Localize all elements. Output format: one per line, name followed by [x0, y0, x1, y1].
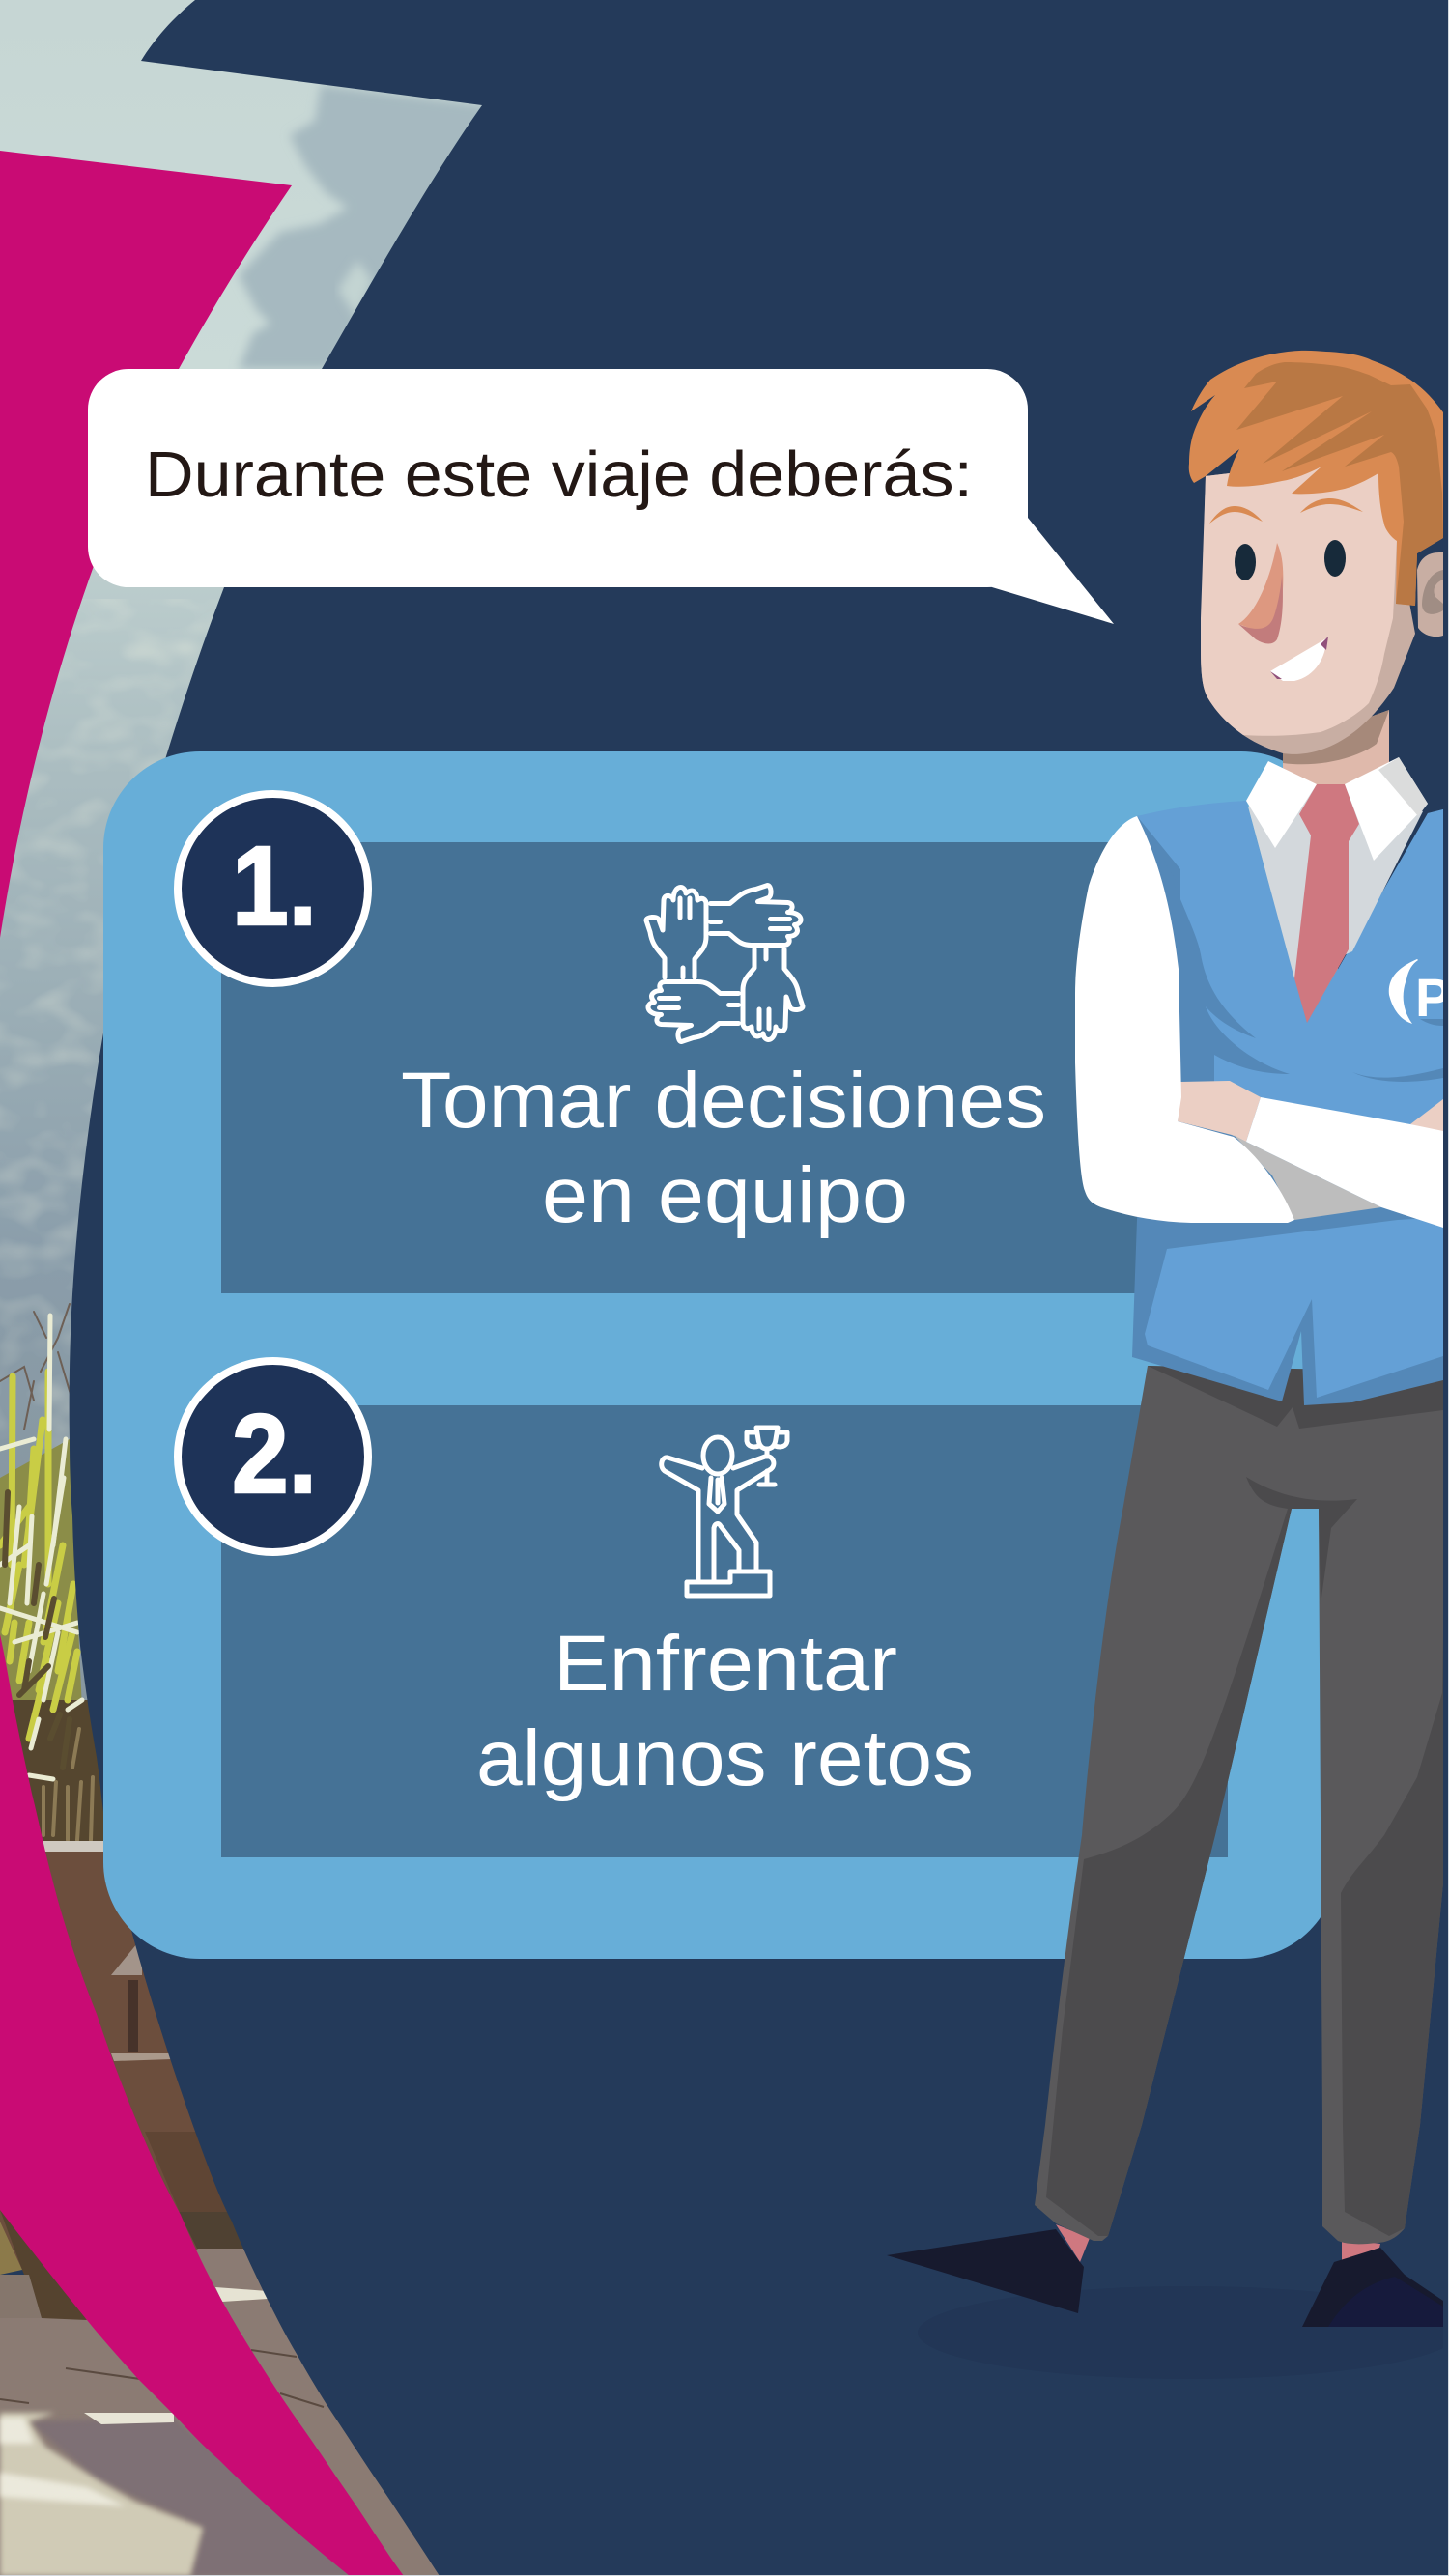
panel 1 text: en equipo — [542, 1151, 908, 1239]
ground shadow under character — [918, 2286, 1449, 2379]
distant tree silhouette — [239, 85, 493, 369]
icon: person with trophy on podium — [662, 1428, 787, 1596]
eyes — [1235, 544, 1256, 580]
vest fold shading — [1180, 900, 1289, 1082]
icon: four interlocked hands — [646, 885, 803, 1041]
panel 2: face challenges — [221, 1405, 1228, 1857]
panel 2 text — [476, 1620, 974, 1802]
panel 1: team decisions — [221, 842, 1256, 1293]
panel 2 text: algunos retos — [476, 1714, 974, 1802]
shoes and socks — [887, 2224, 1443, 2327]
number badge 2 — [178, 1361, 368, 1552]
light blue main panel — [103, 751, 1338, 1959]
hair — [1189, 351, 1443, 606]
head — [1189, 351, 1449, 754]
trousers — [1035, 1366, 1443, 2244]
tie — [1294, 784, 1359, 1023]
panel 2 text: Enfrentar — [554, 1620, 897, 1708]
grass clump — [0, 1304, 106, 1843]
magenta upper swoosh — [0, 151, 292, 938]
number badge 1 — [178, 794, 368, 983]
smile — [1270, 638, 1326, 681]
collar — [1246, 757, 1428, 861]
number badge 2: 2. — [232, 1391, 317, 1516]
panel 1 text: Tomar decisiones — [401, 1057, 1046, 1145]
ear — [1417, 552, 1443, 637]
eyebrows — [1209, 506, 1263, 524]
background photo: sky, grass, planter and pavement — [0, 0, 502, 2576]
speech bubble — [88, 369, 1114, 624]
arms — [1075, 816, 1443, 1228]
character: man in blue vest — [887, 351, 1449, 2327]
neck — [1283, 710, 1389, 787]
vest — [1132, 801, 1449, 1405]
vest logo — [1389, 959, 1443, 1024]
trouser shadows — [1046, 1509, 1292, 2236]
planter — [0, 1841, 319, 2347]
bubble text: Durante este viaje deberás: — [145, 439, 973, 511]
number badge 1: 1. — [232, 823, 317, 948]
vest lower light area — [1145, 1217, 1443, 1398]
shirt front — [1248, 784, 1423, 978]
panel 1 text — [401, 1057, 1046, 1239]
magenta lower swoosh — [0, 1634, 404, 2576]
vest upper light area — [1137, 801, 1443, 1140]
pavement — [0, 2249, 464, 2576]
nose — [1238, 543, 1283, 637]
